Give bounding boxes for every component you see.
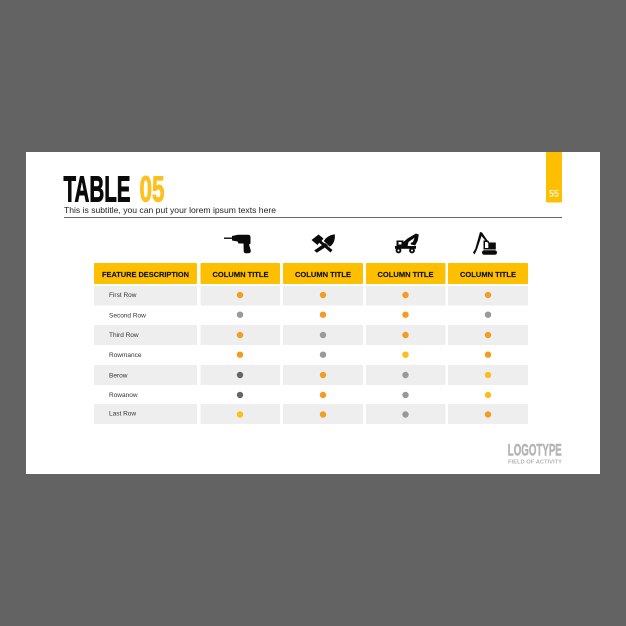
icon: drill — [224, 235, 251, 253]
row stripes — [94, 286, 528, 424]
row labels: Third Row — [109, 332, 139, 339]
panel: white slide — [26, 152, 600, 474]
dots: column 2 — [320, 292, 326, 418]
row labels: Second Row — [109, 312, 146, 320]
table header: column 2: COLUMN TITLE — [295, 270, 351, 279]
table header: feature description: FEATURE DESCRIPTION — [102, 270, 189, 279]
dots: column 4 — [485, 292, 491, 418]
row labels: Last Row — [109, 410, 136, 418]
icon: crawler excavator — [473, 232, 497, 255]
logotype: LOGOTYPE — [508, 440, 562, 460]
table header: column 4: COLUMN TITLE — [460, 270, 516, 279]
row labels: First Row — [109, 292, 137, 299]
dots: column 3 — [402, 292, 409, 418]
table header: column 4 — [448, 263, 528, 284]
table header: feature description — [94, 263, 197, 284]
row labels: Rowanow — [109, 392, 138, 399]
table header: column 3: COLUMN TITLE — [378, 270, 434, 279]
dots: column 1 — [237, 292, 243, 418]
table header: column 2 — [283, 263, 363, 284]
row labels: Berow — [109, 372, 128, 380]
subtitle: This is subtitle, you can put your lorem ipsum texts here — [64, 205, 276, 215]
row labels: Rowmance — [109, 352, 142, 359]
page tab — [546, 152, 562, 202]
row labels — [109, 292, 146, 418]
logotype: FIELD OF ACTIVITY — [508, 460, 562, 466]
title: TABLE — [64, 168, 130, 210]
table header: column 1 — [200, 263, 280, 284]
icon: hammer and trowel — [312, 234, 335, 253]
title: 05 — [140, 168, 164, 210]
page tab: 55 — [549, 188, 559, 200]
table header: column 1: COLUMN TITLE — [212, 270, 268, 279]
logotype — [508, 440, 562, 466]
icon: wheeled excavator — [395, 234, 419, 253]
table header: column 3 — [366, 263, 446, 284]
